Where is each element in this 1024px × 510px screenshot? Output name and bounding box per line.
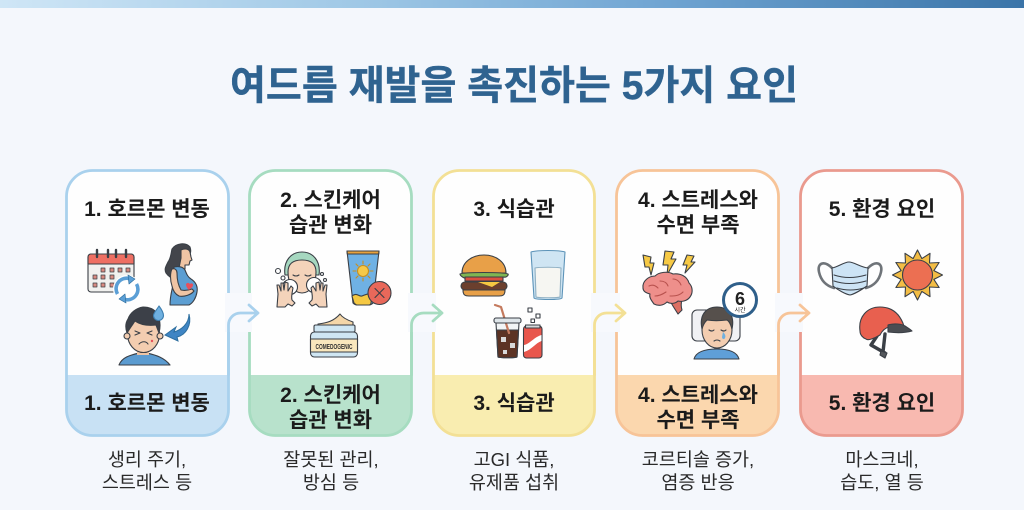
icon: sunscreen tube with X [347, 251, 391, 305]
panel 2 description: 방심 등 [303, 472, 359, 493]
panel 2 heading: 습관 변화 [289, 214, 372, 237]
arrow: step 3 to 4 [591, 293, 625, 375]
panel 4 description: 코르티솔 증가, [642, 449, 754, 470]
panel 2 description: 잘못된 관리, [283, 449, 379, 470]
arrow: step 1 to 2 [225, 293, 258, 375]
panel 4 description: 염증 반응 [661, 472, 735, 493]
panel 4 lower band label: 4. 스트레스와 [638, 384, 758, 407]
panel 4 heading: 4. 스트레스와 [638, 189, 758, 212]
icon: iced cola cup [494, 305, 521, 358]
icon: lightning bolts [643, 251, 695, 275]
arrow: step 2 to 3 [408, 293, 442, 375]
panel 5 lower band label: 5. 환경 요인 [829, 392, 935, 415]
icon: comedogenic cream jar: COMEDOGENIC [316, 344, 352, 351]
panel 1 description: 스트레스 등 [102, 472, 192, 493]
panel 1 heading: 1. 호르몬 변동 [84, 198, 210, 221]
icon: curved down arrow [165, 314, 190, 341]
panel 3 description: 유제품 섭취 [469, 472, 559, 493]
icon: soda can with sugar cubes [524, 308, 542, 358]
panel: 3. diet [434, 170, 594, 436]
icon: helmet [860, 307, 912, 358]
icon: sleeping person with pillow [692, 307, 740, 359]
icon: brain [643, 272, 692, 314]
icon: comedogenic cream jar [310, 314, 358, 357]
panel 5 description: 마스크네, [845, 449, 919, 470]
panel 1 description: 생리 주기, [108, 449, 186, 470]
icon: glass of milk [531, 250, 565, 300]
panel: 4. stress and lack of sleep [616, 170, 778, 436]
panel 2 lower band label: 2. 스킨케어 [280, 384, 381, 407]
panel 4 lower band label: 수면 부족 [656, 409, 740, 432]
icon: 6 hour clock: 6 [735, 289, 745, 309]
icon: stressed person with sweat drop [119, 306, 170, 365]
panel 2 heading: 2. 스킨케어 [280, 189, 381, 212]
panel 3 heading: 3. 식습관 [473, 198, 555, 221]
panel: 2. skincare habit changes [250, 170, 412, 436]
panel 2 lower band label: 습관 변화 [289, 409, 372, 432]
panel: 1. hormonal changes [66, 170, 228, 436]
top gradient bar [0, 0, 1024, 8]
icon: 6 hour clock: 시간 [734, 306, 746, 314]
panel 1 lower band label: 1. 호르몬 변동 [84, 392, 210, 415]
panel 4 heading: 수면 부족 [656, 214, 740, 237]
icon: calendar with cycle arrows [88, 250, 141, 303]
title: 여드름 재발을 촉진하는 5가지 요인 [230, 64, 798, 108]
arrow: step 4 to 5 [775, 293, 809, 375]
icon: face washing [276, 252, 327, 307]
icon: hamburger [460, 255, 508, 296]
icon: 6 hour clock [724, 284, 756, 316]
panel: 5. environmental factors [800, 170, 962, 436]
panel 3 lower band label: 3. 식습관 [473, 392, 555, 415]
panel 3 description: 고GI 식품, [474, 449, 554, 470]
icon: face mask [819, 262, 881, 295]
icon: pregnant woman [165, 244, 197, 305]
panel 5 description: 습도, 열 등 [840, 472, 924, 493]
icon: sun [892, 250, 942, 300]
panel 5 heading: 5. 환경 요인 [829, 198, 935, 221]
